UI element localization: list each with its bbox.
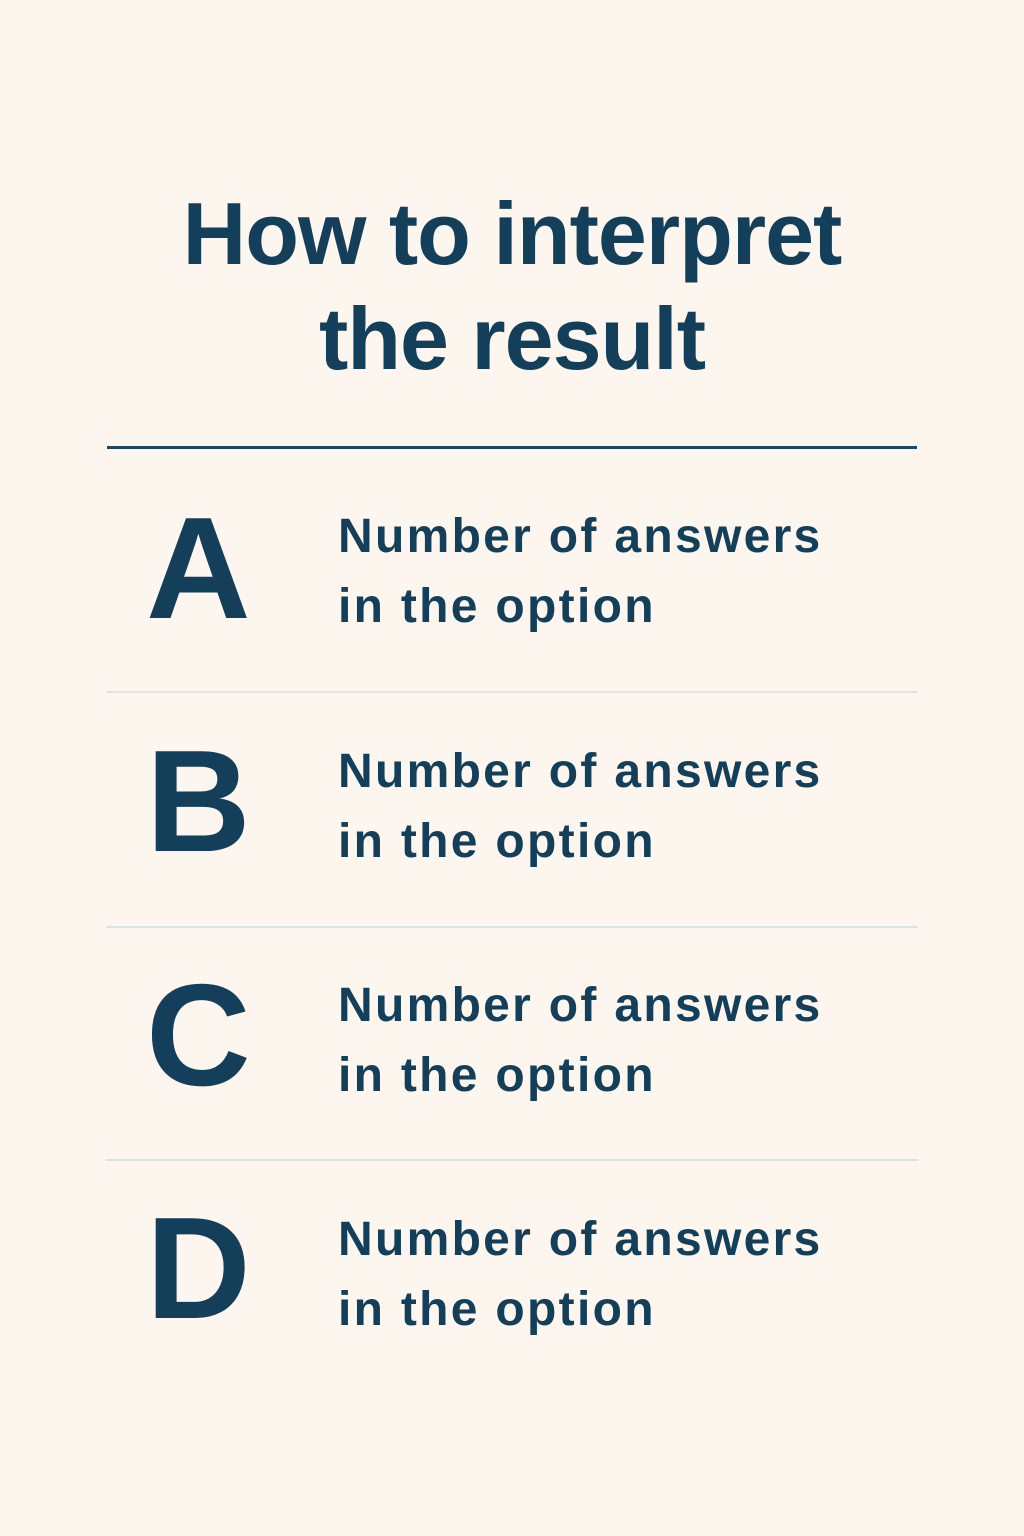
title [183,184,842,388]
letter C: C [146,954,251,1116]
description C [338,979,823,1102]
description D: in the option [338,1283,656,1336]
letter A: A [146,487,251,649]
description D: Number of answers [338,1213,823,1266]
description D [338,1213,823,1336]
description A [338,510,823,633]
description B: in the option [338,815,656,868]
description B: Number of answers [338,745,823,798]
letter D: D [146,1187,251,1349]
description A: in the option [338,580,656,633]
description A: Number of answers [338,510,823,563]
title: the result [319,289,705,388]
description C: Number of answers [338,979,823,1032]
description C: in the option [338,1049,656,1102]
description B [338,745,823,868]
row D [146,1187,823,1349]
title: How to interpret [183,184,841,283]
row A [146,487,823,649]
letter B: B [146,720,251,882]
row C [146,954,823,1116]
row B [146,720,823,882]
